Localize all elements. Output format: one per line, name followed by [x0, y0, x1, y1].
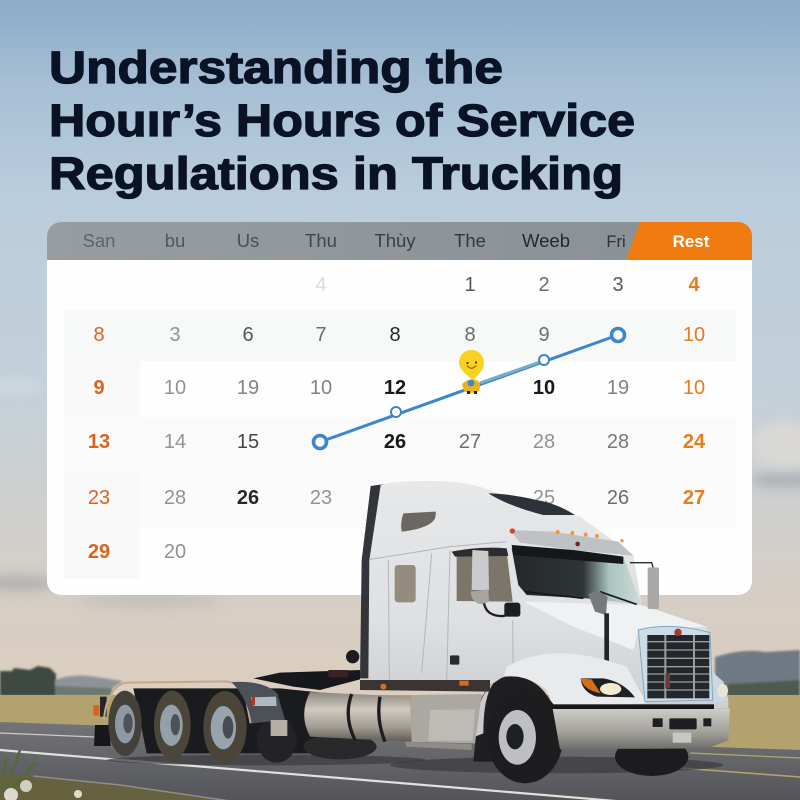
calendar dates: 6 [242, 324, 254, 346]
fender arch [503, 653, 647, 707]
roof window [488, 493, 575, 515]
weekday labels: Us [237, 230, 259, 251]
calendar dates: 7 [315, 324, 327, 346]
calendar dates: 2 [538, 274, 550, 296]
calendar dates: 26 [384, 431, 406, 453]
title: Regulations in Trucking [49, 148, 623, 199]
weekday labels: Thu [305, 230, 337, 251]
calendar dates: 1 [464, 274, 476, 296]
calendar dates: 29 [88, 541, 110, 563]
ground shadow [107, 755, 427, 765]
foreground roadside plants [0, 750, 230, 800]
right headlight [714, 673, 728, 703]
title: Understanding the [49, 42, 503, 93]
calendar dates: 10 [683, 324, 705, 346]
front wheel rear dark [615, 737, 688, 776]
fifth wheel deck [253, 670, 360, 690]
weekday labels: Weeb [522, 230, 570, 251]
rear wheels [108, 691, 377, 764]
calendar dates: 25 [533, 487, 555, 509]
calendar dates: 15 [237, 431, 259, 453]
sleeper windows [401, 512, 436, 532]
fender [104, 681, 251, 723]
title: Houır’s Hours of Service [49, 95, 635, 146]
calendar dates: 13 [88, 431, 110, 453]
front wheel [487, 689, 563, 783]
door mirror [472, 550, 489, 590]
calendar dates: 28 [607, 431, 629, 453]
wiper [525, 592, 637, 604]
calendar dates: 4 [688, 274, 700, 296]
calendar dates: 9 [93, 377, 105, 399]
truck cab [304, 481, 730, 783]
fender panel [232, 682, 285, 723]
calendar dates: 23 [88, 487, 110, 509]
sleeper back dark stripe [360, 484, 385, 678]
cab marker lights [510, 528, 624, 546]
calendar dates: 23 [310, 487, 332, 509]
fuel tanks [304, 692, 412, 742]
calendar dates: 10 [164, 377, 186, 399]
calendar dates [88, 274, 706, 563]
calendar dates: 27 [683, 487, 705, 509]
title [49, 42, 635, 199]
calendar dates: 3 [612, 274, 624, 296]
cab shadow on road [390, 757, 723, 773]
calendar dates: 4 [315, 274, 327, 296]
sleeper skirt and fairing band [360, 680, 490, 692]
weekday labels: San [83, 230, 115, 251]
windshield [512, 548, 642, 605]
calendar dates: 10 [310, 377, 332, 399]
front bumper [553, 709, 730, 749]
grille [638, 626, 713, 702]
calendar dates: 24 [683, 431, 706, 453]
right mirror [630, 563, 653, 568]
calendar dates: 3 [169, 324, 181, 346]
side window [457, 552, 513, 602]
weekday labels: The [454, 230, 486, 251]
headlight [581, 678, 635, 697]
calendar dates: 28 [164, 487, 186, 509]
weekday labels: Fri [606, 233, 626, 251]
calendar dates: 20 [164, 541, 186, 563]
background: distant hills and trees [0, 650, 800, 697]
background: grass field [0, 695, 800, 751]
step box [407, 694, 482, 743]
icon: yellow smiley pin [459, 350, 484, 394]
weekday labels: Thùy [374, 230, 416, 251]
calendar dates: 10 [533, 377, 555, 399]
calendar dates: 8 [464, 324, 476, 346]
cab body [368, 481, 728, 708]
panel: calendar [47, 222, 752, 595]
background: clouds [0, 380, 800, 606]
road lane markings [0, 733, 800, 800]
calendar dates: 12 [384, 377, 406, 399]
hood mirror and antenna [588, 591, 607, 615]
calendar body [47, 222, 752, 595]
mudflap [94, 725, 111, 746]
weekday labels: bu [165, 230, 185, 251]
sleeper panel lines [370, 542, 507, 559]
calendar header bar [47, 222, 752, 260]
calendar dates: 19 [607, 377, 629, 399]
calendar dates: 19 [237, 377, 259, 399]
weekday labels: Rest [673, 232, 710, 251]
calendar dates: 10 [683, 377, 705, 399]
background: road [0, 722, 800, 800]
chassis dark block [133, 688, 360, 753]
calendar dates: 26 [607, 487, 629, 509]
calendar dates: 26 [237, 487, 259, 509]
calendar dates: 9 [538, 324, 550, 346]
route line across the calendar [314, 328, 624, 448]
weekday labels [83, 230, 710, 251]
hood highlight [523, 602, 707, 650]
calendar dates: 8 [389, 324, 401, 346]
calendar dates: 28 [533, 431, 555, 453]
calendar dates: 14 [164, 431, 186, 453]
rear of truck: wheels and chassis [93, 650, 427, 765]
calendar dates: 8 [93, 324, 105, 346]
rest column header [626, 222, 752, 260]
calendar dates: 27 [459, 431, 481, 453]
visor [510, 530, 633, 556]
